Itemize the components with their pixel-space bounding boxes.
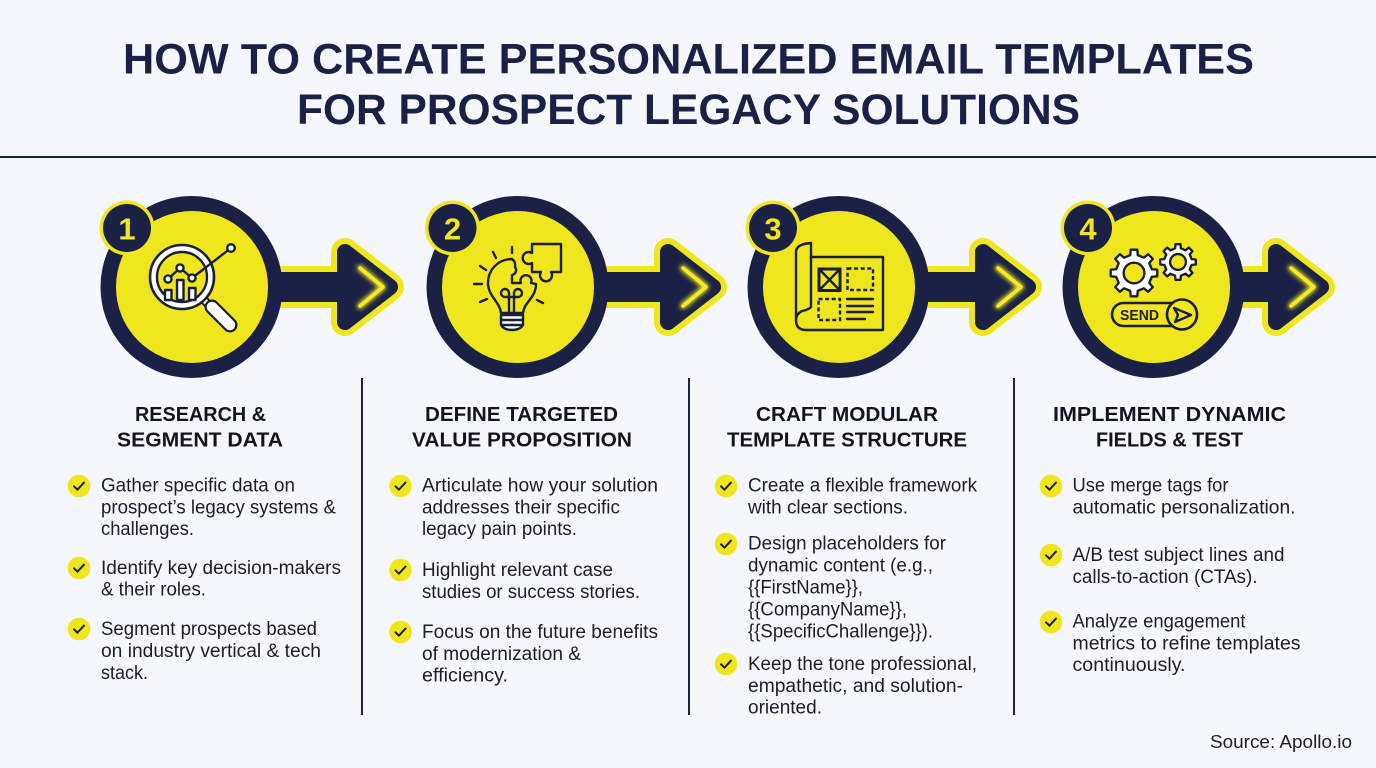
heading: implement dynamic fields and test: IMPLEMENT DYNAMIC: [1053, 403, 1286, 426]
bullet: articulate: addresses their specific: [422, 498, 620, 518]
step 3 number badge: [746, 200, 800, 256]
step 3 number badge: 3: [764, 212, 782, 246]
step 1 number badge: [100, 200, 154, 256]
heading: research and segment data: [117, 403, 283, 452]
bullet: focus: Focus on the future benefits: [422, 622, 658, 643]
bullet: highlight: studies or success stories.: [422, 582, 640, 603]
bullet: design placeholders: {{FirstName}},: [748, 578, 863, 598]
bullet: segment prospects: [68, 618, 321, 684]
step 2 circle: [426, 196, 608, 378]
bullet: highlight: Highlight relevant case: [422, 560, 613, 581]
bullet: identify decision-makers: Identify key decision-makers: [101, 558, 341, 579]
bullet: design placeholders: {{CompanyName}},: [748, 600, 907, 620]
bullet: articulate: legacy pain points.: [422, 519, 577, 540]
step 1 circle: [100, 196, 282, 378]
source note: Source: Apollo.io: [1210, 731, 1352, 752]
bullet: articulate: [389, 475, 658, 540]
bullet: identify decision-makers: [68, 557, 341, 600]
bullet: design placeholders: Design placeholders for: [748, 534, 947, 554]
bullet: design placeholders: dynamic content (e.g.,: [748, 556, 933, 576]
bullet: a/b test: calls-to-action (CTAs).: [1072, 567, 1258, 588]
bullet: create framework: [715, 475, 977, 518]
icon: blueprint layout: [796, 243, 883, 330]
arrow 1: [270, 252, 390, 322]
icon: gears and send button: SEND: [1120, 307, 1159, 324]
bullet: identify decision-makers: & their roles.: [101, 580, 206, 600]
heading: craft modular template structure: TEMPLATE STRUCTURE: [727, 428, 967, 452]
bullet: create framework: with clear sections.: [747, 498, 908, 518]
bullet: focus: [389, 621, 658, 686]
title: FOR PROSPECT LEGACY SOLUTIONS: [297, 86, 1080, 134]
step 3 circle: [748, 196, 930, 378]
heading: define targeted value proposition: [412, 403, 632, 452]
bullet: articulate: Articulate how your solution: [422, 476, 658, 496]
bullet: analyze engagement: continuously.: [1072, 655, 1186, 676]
heading: implement dynamic fields and test: [1053, 403, 1286, 452]
panel: step 3 craft modular template structure: [715, 196, 1028, 718]
title: [123, 36, 1254, 134]
heading: craft modular template structure: CRAFT MODULAR: [756, 403, 938, 426]
bullet: keep the tone: Keep the tone professional,: [748, 654, 977, 675]
bullet: a/b test: [1040, 544, 1284, 588]
step 2 number badge: 2: [444, 212, 461, 246]
bullet: focus: efficiency.: [422, 666, 508, 686]
bullet: analyze engagement: Analyze engagement: [1072, 612, 1246, 632]
bullet: gather data: challenges.: [101, 519, 194, 540]
bullet: a/b test: A/B test subject lines and: [1072, 545, 1284, 566]
title: HOW TO CREATE PERSONALIZED EMAIL TEMPLATES: [123, 36, 1254, 84]
heading: research and segment data: SEGMENT DATA: [117, 428, 283, 452]
bullet: segment prospects: on industry vertical & tech: [101, 641, 321, 662]
arrow 4: [1201, 252, 1321, 322]
icon: light bulb with puzzle piece: [474, 244, 561, 330]
bullet: gather data: [68, 475, 336, 540]
bullet: create framework: Create a flexible framework: [748, 476, 977, 496]
heading: implement dynamic fields and test: FIELDS & TEST: [1096, 428, 1243, 452]
bullet: analyze engagement: [1040, 611, 1300, 676]
arrow 3: [908, 252, 1028, 322]
bullet: keep the tone: oriented.: [748, 698, 822, 718]
bullet: focus: of modernization &: [422, 644, 581, 665]
bullet: gather data: Gather specific data on: [101, 476, 295, 496]
bullet: merge tags: automatic personalization.: [1072, 498, 1296, 518]
bullet: keep the tone: [715, 653, 977, 718]
arrow 2: [593, 252, 713, 322]
bullet: merge tags: [1040, 475, 1296, 518]
step 4 number badge: 4: [1079, 212, 1097, 246]
panel: step 4 implement dynamic fields and test: [1040, 196, 1321, 676]
step 1 number badge: 1: [118, 212, 136, 246]
step 4 number badge: [1060, 200, 1116, 256]
bullet: segment prospects: Segment prospects based: [101, 619, 317, 640]
heading: define targeted value proposition: VALUE PROPOSITION: [412, 428, 632, 452]
bullet: analyze engagement: metrics to refine templates: [1072, 634, 1300, 654]
bullet: highlight: [389, 559, 640, 603]
bullet: design placeholders: [715, 533, 947, 642]
bullet: segment prospects: stack.: [101, 663, 148, 684]
bullet: merge tags: Use merge tags for: [1072, 476, 1229, 496]
icon: magnifier with chart: [150, 244, 235, 325]
heading: define targeted value proposition: DEFINE TARGETED: [425, 403, 618, 426]
bullet: keep the tone: empathetic, and solution-: [748, 676, 963, 697]
bullet: gather data: prospect’s legacy systems &: [101, 498, 336, 518]
bullet: design placeholders: {{SpecificChallenge}}).: [748, 622, 933, 642]
heading: craft modular template structure: [727, 403, 967, 452]
panel: step 1 research and segment data: [68, 196, 390, 684]
icon: gears and send button: [1111, 244, 1197, 330]
heading: research and segment data: RESEARCH &: [135, 403, 266, 426]
step 4 circle: [1062, 196, 1244, 378]
panel: step 2 define targeted value proposition: [389, 196, 713, 686]
step 2 number badge: [425, 200, 480, 256]
